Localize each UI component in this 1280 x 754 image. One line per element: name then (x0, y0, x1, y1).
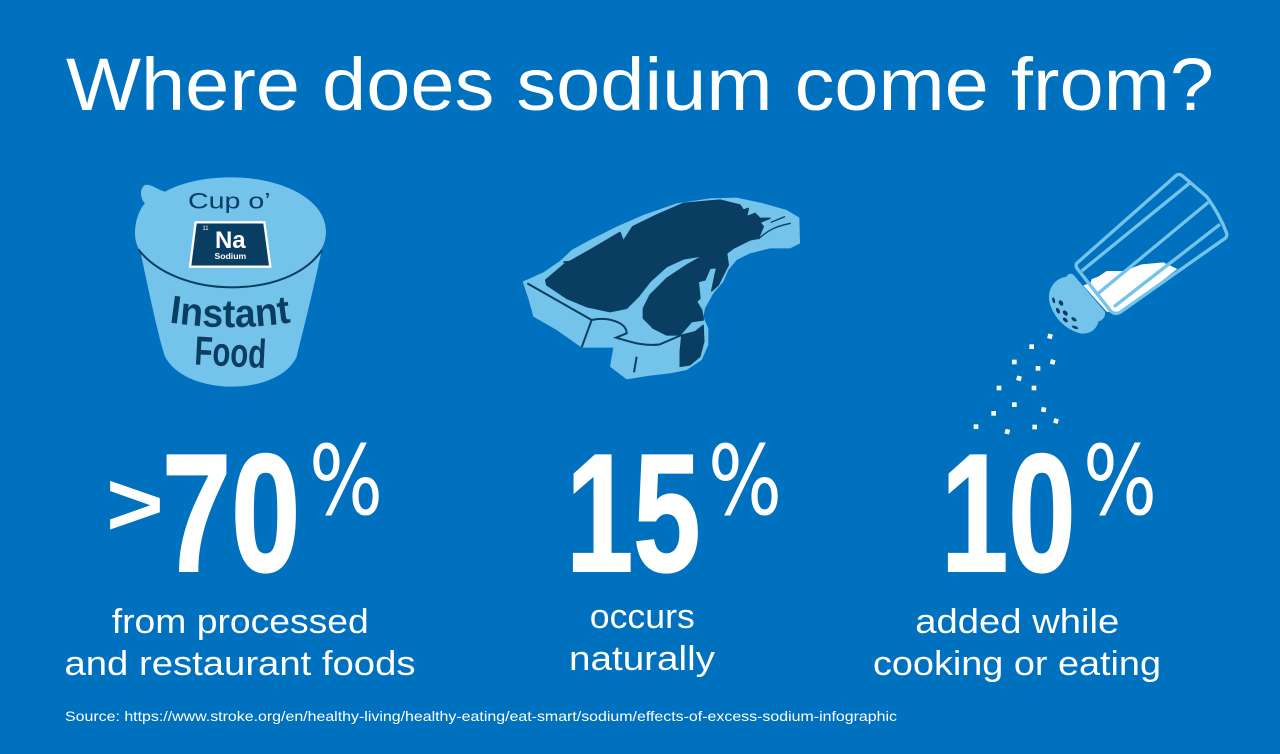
glass shaker outline (1076, 174, 1227, 313)
shaker holes (1052, 297, 1079, 330)
shaker cap (1049, 274, 1105, 334)
stat: >70% (106, 420, 383, 607)
caption: added while cooking: cooking or eating (873, 645, 1161, 683)
cup text: Instant: Instant (172, 296, 291, 328)
source line: Source: https://www.stroke.org/en/healthy-living/healthy-eating/eat-smart/sodium/effects-of-excess-sodium-infographic (65, 708, 897, 724)
stat: >70%: 70 (162, 420, 300, 607)
stat: >70%: % (309, 425, 383, 537)
stat: 15%: % (708, 425, 782, 537)
caption: occurs naturally: naturally (569, 640, 715, 678)
caption: processed foods: from processed (112, 603, 369, 641)
salt grains (974, 333, 1059, 435)
icon: steak (523, 198, 800, 379)
sodium element label: 11 (202, 226, 209, 232)
stat: 10%: % (1083, 425, 1157, 537)
stat: 15% (566, 420, 782, 608)
caption: added while cooking: added while (915, 603, 1119, 641)
cup text: Food: Food (194, 328, 267, 377)
salt fill (1083, 262, 1177, 313)
sodium element label: Na (215, 227, 246, 254)
stat: 10% (941, 420, 1157, 608)
caption: occurs naturally: occurs (590, 598, 695, 636)
sodium element label: Sodium (214, 251, 246, 261)
title: Where does sodium come from? (66, 43, 1214, 126)
stat: 15%: 15 (566, 420, 701, 608)
stat: 10%: 10 (941, 420, 1076, 608)
lid text: Cup o’ (188, 188, 271, 213)
stat: >70%: > (106, 454, 164, 555)
icon: salt shaker (974, 174, 1227, 435)
sodium element label (190, 222, 270, 267)
caption: processed foods: and restaurant foods (64, 645, 415, 683)
icon: instant food cup (135, 177, 326, 387)
